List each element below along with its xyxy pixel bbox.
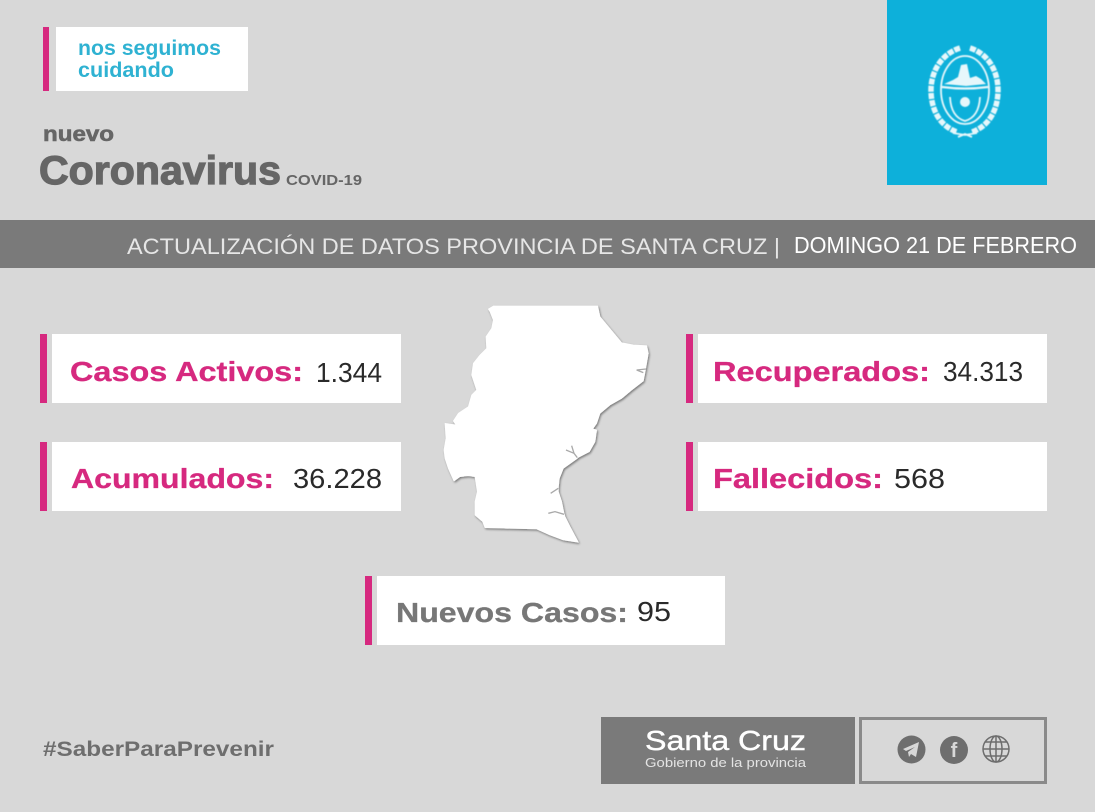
heading: nuevo Coronavirus COVID-19: COVID-19: [286, 172, 362, 189]
title band: DOMINGO 21 DE FEBRERO: [794, 232, 1077, 258]
card: Nuevos Casos: Nuevos Casos:: [396, 597, 628, 628]
icon: telegram: [898, 736, 926, 764]
icon: facebook: f: [951, 740, 958, 762]
card: Casos Activos: Casos Activos:: [70, 356, 303, 387]
social icons box: [860, 718, 1046, 782]
card: Acumulados: Acumulados:: [71, 463, 274, 494]
card: Fallecidos: Fallecidos:: [713, 463, 883, 494]
heading: nuevo Coronavirus COVID-19: nuevo: [43, 123, 114, 146]
card: Casos Activos: 1.344: [316, 357, 382, 388]
tag: nos seguimos cuidando: [43, 27, 248, 91]
logo: Santa Cruz: [601, 717, 855, 784]
card: Nuevos Casos: [365, 576, 725, 645]
heading: nuevo Coronavirus COVID-19: [39, 123, 362, 193]
map: Santa Cruz province: [444, 306, 648, 542]
title band: [0, 220, 1095, 268]
icon: globe: [983, 736, 1009, 762]
tag: nos seguimos cuidando: cuidando: [78, 59, 174, 82]
card: Fallecidos: [686, 442, 1047, 511]
card: Recuperados: 34.313: [943, 356, 1023, 387]
icon: coat of arms: [931, 48, 998, 137]
tag: nos seguimos cuidando: nos seguimos: [78, 37, 221, 60]
card: Fallecidos: 568: [894, 463, 945, 494]
flag panel with coat of arms: [887, 0, 1047, 185]
hashtag: #SaberParaPrevenir: [43, 738, 274, 761]
card: Acumulados: [40, 442, 401, 511]
card: Acumulados: 36.228: [293, 463, 382, 494]
card: Nuevos Casos: 95: [637, 596, 671, 627]
logo: Santa Cruz: Santa Cruz: [645, 725, 806, 756]
card: Recuperados: [686, 334, 1047, 403]
icon: facebook: [940, 736, 968, 764]
card: Recuperados: Recuperados:: [713, 356, 930, 387]
logo: Santa Cruz: Gobierno de la provincia: [645, 755, 807, 770]
heading: nuevo Coronavirus COVID-19: Coronavirus: [39, 149, 281, 193]
title band: ACTUALIZACIÓN DE DATOS PROVINCIA DE SANTA CRUZ |: [127, 234, 780, 259]
card: Casos Activos: [40, 334, 401, 403]
